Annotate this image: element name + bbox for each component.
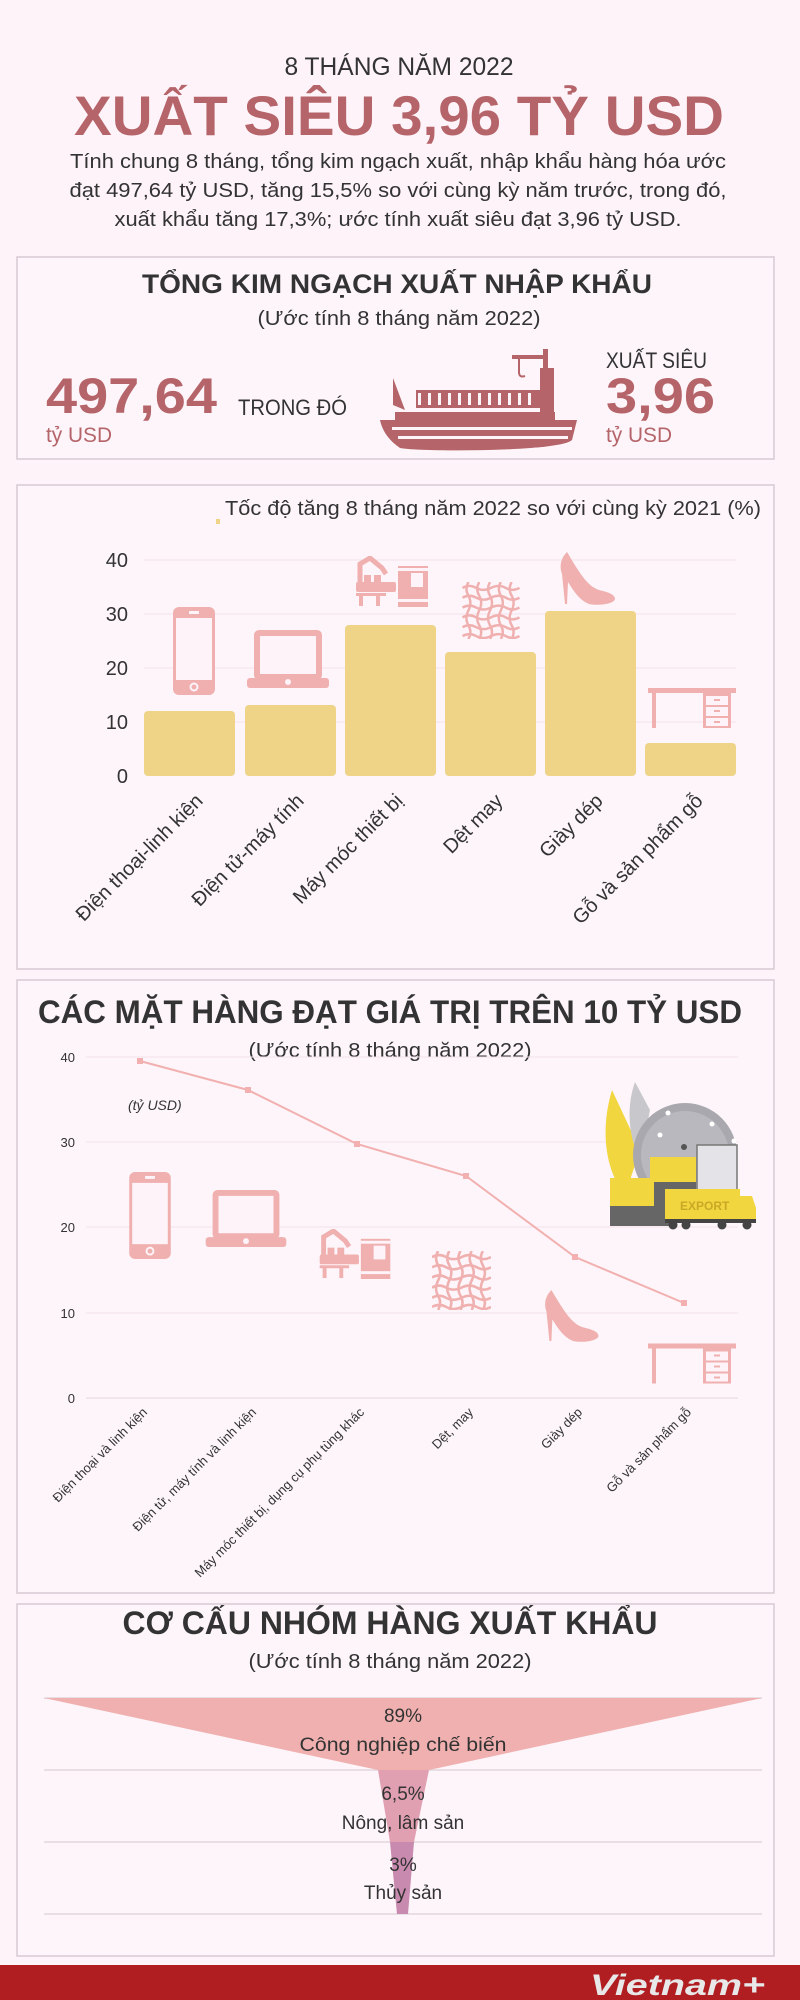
icon: laptop bbox=[206, 1190, 286, 1247]
icon: shoe bbox=[561, 552, 615, 605]
y axis labels bbox=[106, 550, 128, 788]
panel: growth bar chart bbox=[17, 485, 774, 969]
x axis labels: Điện tử-máy tính bbox=[188, 790, 309, 911]
x axis labels: Gỗ và sản phẩm gỗ bbox=[568, 789, 708, 929]
panel heading: CÁC MẶT HÀNG ĐẠT GIÁ TRỊ TRÊN 10 TỶ USD bbox=[38, 994, 742, 1030]
y axis labels: 10 bbox=[106, 712, 128, 734]
funnel labels: 6,5% bbox=[381, 1784, 425, 1805]
export surplus value: tỷ USD bbox=[606, 424, 672, 447]
funnel labels: 89% bbox=[384, 1706, 422, 1727]
label: trong đó: TRONG ĐÓ bbox=[238, 395, 347, 420]
illustration: export globe and truck: EXPORT bbox=[680, 1199, 730, 1213]
y axis labels: 0 bbox=[117, 766, 128, 788]
x axis labels: Điện thoại-linh kiện bbox=[72, 790, 208, 926]
legend: Tốc độ tăng 8 tháng năm 2022 so với cùng kỳ 2021 (%) bbox=[225, 498, 761, 520]
line series bbox=[137, 1058, 687, 1306]
funnel labels: Thủy sản bbox=[364, 1883, 442, 1904]
total value: 497,64 bbox=[46, 368, 217, 424]
funnel chart bbox=[44, 1698, 762, 1914]
x axis labels: Máy móc thiết bị, dụng cụ phụ tùng khác bbox=[191, 1404, 367, 1580]
x axis labels: Điện tử, máy tính và linh kiện bbox=[129, 1405, 259, 1534]
intro paragraph: Tính chung 8 tháng, tổng kim ngạch xuất, nhập khẩu hàng hóa ước bbox=[70, 151, 726, 173]
panel: total trade bbox=[17, 257, 774, 459]
y axis labels: 20 bbox=[106, 658, 128, 680]
panel subheading: (Ước tính 8 tháng năm 2022) bbox=[248, 1040, 532, 1062]
funnel labels: Công nghiệp chế biến bbox=[300, 1735, 506, 1756]
panel: items over 10 billion USD line chart bbox=[17, 980, 774, 1593]
funnel labels: 3% bbox=[389, 1855, 417, 1876]
unit label: (tỷ USD) bbox=[128, 1097, 182, 1113]
panel heading: CƠ CẤU NHÓM HÀNG XUẤT KHẨU bbox=[122, 1605, 658, 1641]
y axis labels: 30 bbox=[61, 1135, 75, 1150]
icon: desk bbox=[648, 1344, 736, 1384]
x axis labels: Dệt may bbox=[439, 790, 508, 858]
icon: robot bbox=[320, 1231, 390, 1279]
y axis labels: 10 bbox=[61, 1306, 75, 1321]
x axis labels: Điện thoại và linh kiện bbox=[50, 1405, 150, 1505]
y axis labels: 20 bbox=[61, 1220, 75, 1235]
export surplus value: 3,96 bbox=[606, 368, 715, 424]
funnel labels: Nông, lâm sản bbox=[342, 1813, 464, 1834]
icon: robot bbox=[356, 558, 428, 607]
intro paragraph: đạt 497,64 tỷ USD, tăng 15,5% so với cùng kỳ năm trước, trong đó, bbox=[70, 180, 726, 202]
export surplus value bbox=[606, 348, 715, 447]
total value: tỷ USD bbox=[46, 424, 112, 447]
x axis labels: Máy móc thiết bị bbox=[289, 790, 408, 908]
icon: textile bbox=[432, 1251, 491, 1310]
icon: shoe bbox=[545, 1290, 598, 1342]
funnel labels bbox=[300, 1706, 506, 1904]
intro paragraph: xuất khẩu tăng 17,3%; ước tính xuất siêu đạt 3,96 tỷ USD. bbox=[114, 209, 682, 231]
illustration: export globe and truck bbox=[606, 1082, 756, 1230]
icon: laptop bbox=[247, 630, 329, 688]
x axis labels bbox=[72, 789, 708, 929]
x axis labels: Giày dép bbox=[535, 790, 608, 862]
icon: cargo ship bbox=[380, 349, 577, 450]
panel subheading: (Ước tính 8 tháng năm 2022) bbox=[248, 1651, 532, 1673]
y axis labels: 30 bbox=[106, 604, 128, 626]
export surplus value: XUẤT SIÊU bbox=[606, 348, 707, 373]
icon: phone bbox=[173, 607, 215, 695]
x axis labels: Giày dép bbox=[538, 1405, 585, 1452]
bars bbox=[144, 611, 736, 776]
x axis labels: Gỗ và sản phẩm gỗ bbox=[603, 1405, 694, 1495]
x axis labels bbox=[50, 1404, 694, 1580]
y axis labels: 40 bbox=[106, 550, 128, 572]
y axis labels bbox=[61, 1050, 75, 1406]
subtitle: 8 tháng năm 2022: 8 THÁNG NĂM 2022 bbox=[284, 52, 514, 81]
total value bbox=[46, 368, 217, 447]
main title: XUẤT SIÊU 3,96 TỶ USD bbox=[74, 84, 724, 147]
icon: textile bbox=[462, 582, 520, 639]
icon: phone bbox=[129, 1172, 171, 1259]
icon: desk bbox=[648, 688, 736, 728]
intro paragraph bbox=[70, 151, 726, 231]
y axis labels: 0 bbox=[68, 1391, 75, 1406]
y axis labels: 40 bbox=[61, 1050, 75, 1065]
x axis labels: Dệt, may bbox=[429, 1404, 476, 1452]
footer bbox=[0, 1965, 800, 2000]
panel: export structure funnel bbox=[17, 1604, 774, 1956]
panel heading: TỔNG KIM NGẠCH XUẤT NHẬP KHẨU bbox=[142, 268, 652, 299]
panel subheading: (Ước tính 8 tháng năm 2022) bbox=[258, 308, 540, 330]
header bbox=[70, 52, 726, 231]
